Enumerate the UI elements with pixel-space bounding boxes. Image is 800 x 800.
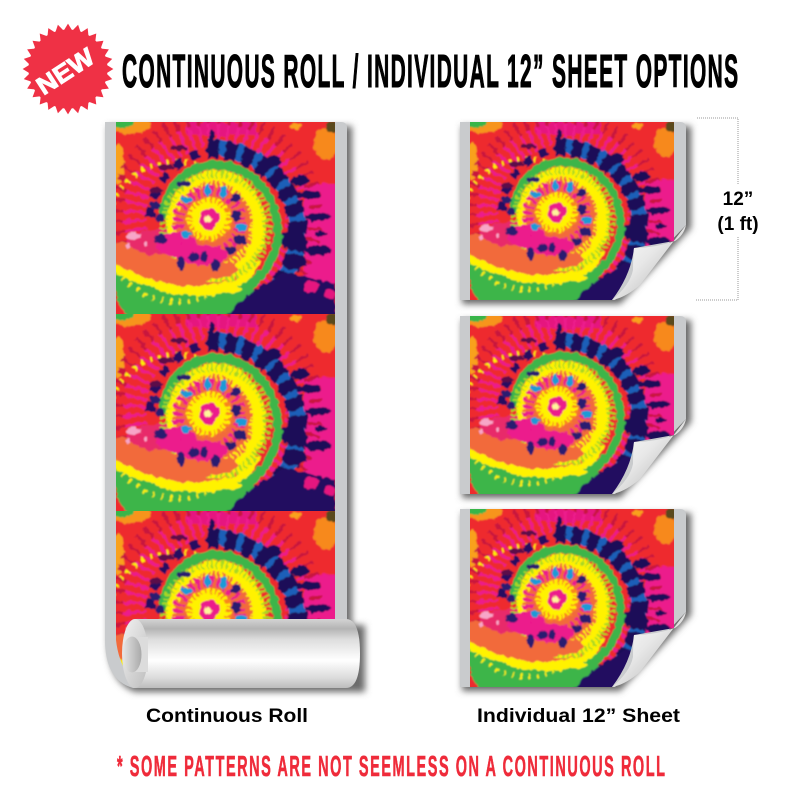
dimension marker: 12” [723, 189, 753, 210]
tie-dye tiles [116, 122, 335, 666]
label: individual sheet: Individual 12” Sheet [477, 706, 681, 727]
cylinder [135, 619, 360, 688]
badge: NEW [15, 16, 121, 122]
sheet 3 [460, 500, 691, 697]
badge: NEW: NEW [32, 43, 100, 101]
continuous roll graphic [105, 112, 365, 718]
cylinder end [122, 619, 148, 688]
roll shadow [108, 126, 365, 692]
cylinder core [132, 637, 148, 672]
dimension marker [695, 118, 759, 300]
footnote: * SOME PATTERNS ARE NOT SEEMLESS ON A CONTINUOUS ROLL [117, 749, 665, 782]
sheet 2 [460, 307, 691, 504]
sheet 1 [460, 113, 691, 310]
label: continuous roll: Continuous Roll [146, 706, 308, 727]
dimension marker: (1 ft) [717, 214, 759, 235]
title: CONTINUOUS ROLL / INDIVIDUAL 12” SHEET OPTIONS [122, 46, 738, 97]
roll backing [105, 122, 347, 688]
